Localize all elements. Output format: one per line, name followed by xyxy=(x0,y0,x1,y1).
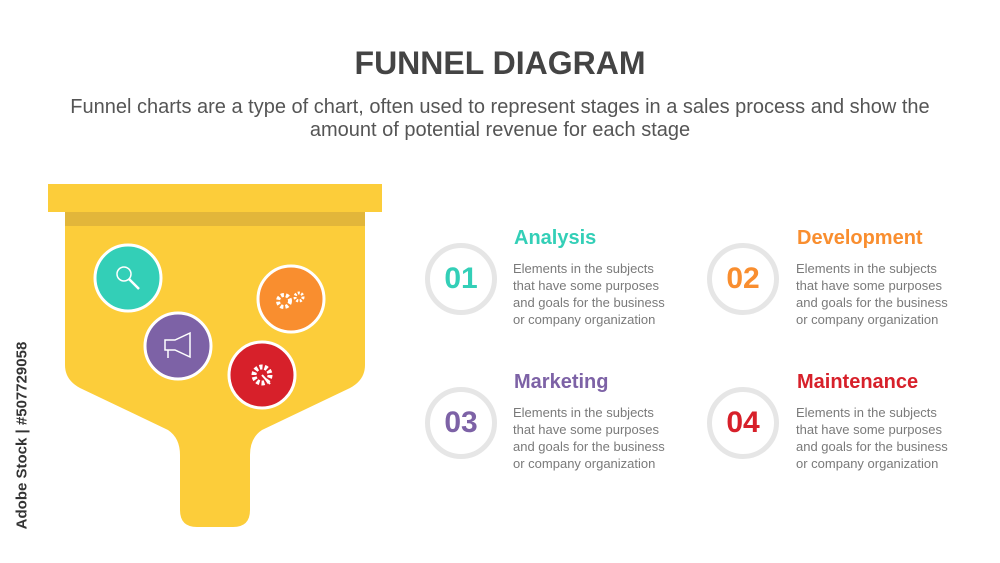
item 03: and goals for the business xyxy=(513,439,665,454)
item 04: 04 xyxy=(726,406,760,439)
item 04: and goals for the business xyxy=(796,439,948,454)
item 01: 01 xyxy=(444,262,478,295)
icon: megaphone xyxy=(145,313,211,379)
title: FUNNEL DIAGRAM xyxy=(355,45,645,81)
item 01: Elements in the subjects xyxy=(513,261,654,276)
item 03: or company organization xyxy=(513,456,655,471)
item 03: Marketing xyxy=(514,371,608,393)
item 02: and goals for the business xyxy=(796,295,948,310)
item 02: that have some purposes xyxy=(796,278,942,293)
item 02 xyxy=(707,227,948,327)
watermark side text: Adobe Stock | #507729058 xyxy=(14,342,30,529)
item 03: that have some purposes xyxy=(513,422,659,437)
item 03 xyxy=(425,371,665,471)
item 03: 03 xyxy=(444,406,478,439)
item 03: Elements in the subjects xyxy=(513,405,654,420)
item 04: Elements in the subjects xyxy=(796,405,937,420)
item 01: Analysis xyxy=(514,227,596,249)
subtitle: Funnel charts are a type of chart, often used to represent stages in a sales process and show the xyxy=(70,96,930,118)
item 02: Elements in the subjects xyxy=(796,261,937,276)
item 02: Development xyxy=(797,227,923,249)
item 01 xyxy=(425,227,665,327)
item 04 xyxy=(707,371,948,471)
item 04: that have some purposes xyxy=(796,422,942,437)
item 02: 02 xyxy=(726,262,760,295)
funnel xyxy=(48,184,382,527)
item 04: or company organization xyxy=(796,456,938,471)
item 02: or company organization xyxy=(796,312,938,327)
subtitle xyxy=(70,96,930,141)
item 01: that have some purposes xyxy=(513,278,659,293)
icon: gears xyxy=(258,266,324,332)
item 01: and goals for the business xyxy=(513,295,665,310)
item 04: Maintenance xyxy=(797,371,918,393)
subtitle: amount of potential revenue for each stage xyxy=(310,119,690,141)
icon: search xyxy=(95,245,161,311)
item 01: or company organization xyxy=(513,312,655,327)
icon: gear wrench xyxy=(229,342,295,408)
